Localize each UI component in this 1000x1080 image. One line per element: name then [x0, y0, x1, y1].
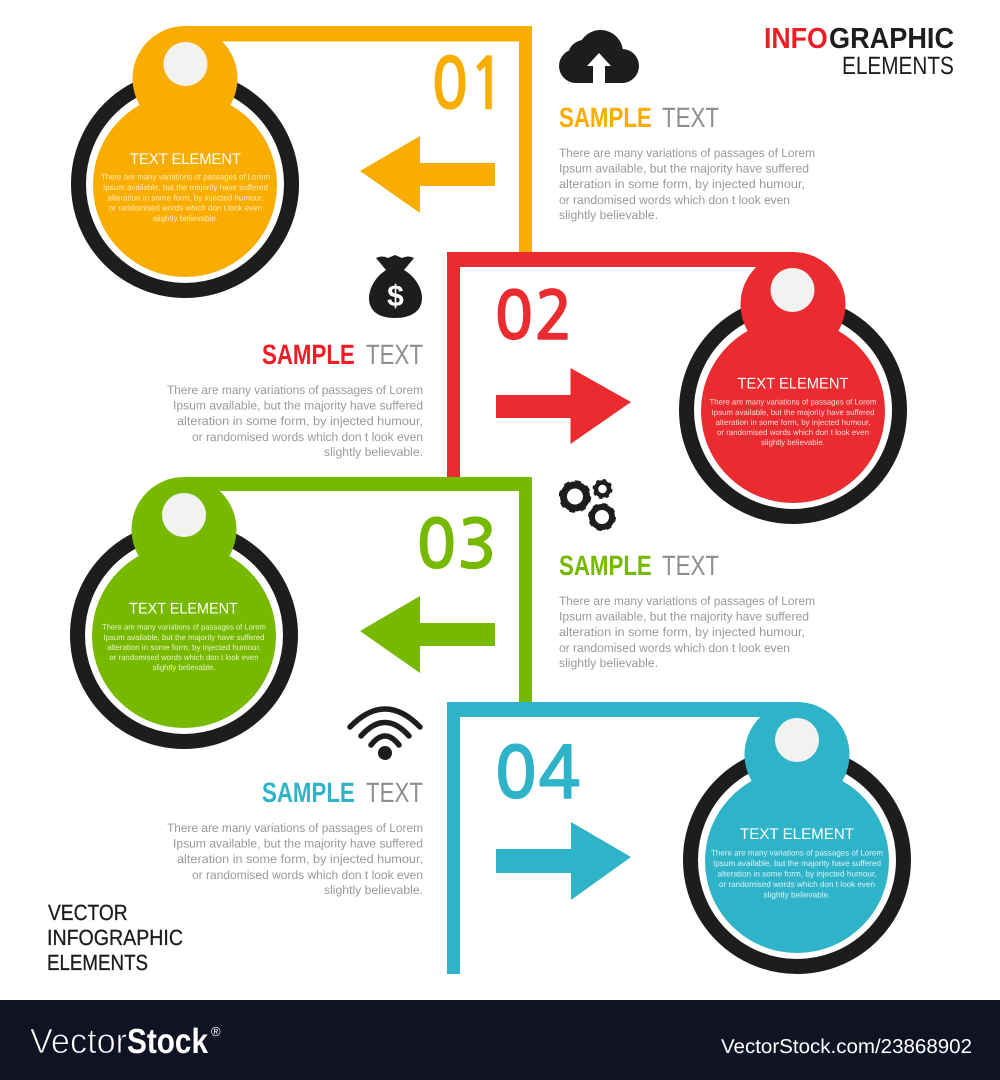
footer band [0, 1000, 1000, 1080]
footer logo [30, 1022, 221, 1061]
text block 1: alteration in some form, by injected humour, [559, 177, 805, 191]
number 02: 02 [494, 284, 574, 350]
medallion 1: or randomised words which don t look even [109, 204, 262, 212]
text block 4: SAMPLE [262, 777, 355, 808]
medallion 2: or randomised words which don t look even [717, 428, 869, 437]
medallion 2: slightly believable. [761, 438, 825, 447]
text block 3: alteration in some form, by injected humour, [559, 625, 805, 639]
number 04: 04 [494, 737, 581, 809]
text block 2: or randomised words which don t look even [192, 430, 423, 444]
medallion 4: or randomised words which don t look even [719, 880, 875, 889]
icon: cloud upload [559, 30, 639, 83]
text block 4: There are many variations of passages of Lorem [167, 821, 423, 835]
text block 4 [167, 777, 423, 897]
text block 2: SAMPLE [262, 339, 355, 370]
medallion 3: TEXT ELEMENT [129, 600, 238, 618]
footer url: VectorStock.com/23868902 [721, 1036, 972, 1058]
connector: red [447, 252, 793, 478]
icon: money bag [369, 255, 422, 318]
text block 2: TEXT [366, 339, 423, 370]
medallion 3: alteration in some form, by injected humour, [107, 643, 261, 652]
medallion 3 [78, 477, 290, 742]
medallion 2 [686, 252, 900, 516]
title: INFO [764, 23, 828, 55]
text block 4: slightly believable. [324, 883, 423, 897]
medallion 4: slightly believable. [764, 890, 830, 900]
medallion 2: TEXT ELEMENT [737, 376, 849, 392]
text block 3 [559, 550, 815, 670]
connector: blue [447, 702, 797, 974]
footer logo: ® [211, 1024, 221, 1039]
text block 1 [559, 102, 815, 222]
text block 2: Ipsum available, but the majority have suffered [173, 398, 423, 412]
caption: vector infographic elements: INFOGRAPHIC [47, 925, 183, 950]
medallion 2: alteration in some form, by injected humour, [716, 418, 870, 427]
footer logo: Stock [127, 1022, 208, 1061]
arrow 3 [360, 596, 495, 673]
text block 3: There are many variations of passages of Lorem [559, 594, 815, 608]
text block 2: slightly believable. [324, 445, 423, 459]
medallion 1 [78, 26, 292, 290]
text block 3: SAMPLE [559, 550, 652, 581]
text block 3: slightly believable. [559, 656, 658, 670]
text block 4: or randomised words which don t look even [192, 868, 423, 882]
medallion 1: TEXT ELEMENT [130, 151, 242, 168]
medallion 4: TEXT ELEMENT [740, 826, 854, 843]
medallion 3: or randomised words which don t look even [110, 653, 258, 662]
medallion 3: slightly believable. [152, 663, 216, 672]
medallion 1: There are many variations of passages of Lorem [101, 173, 270, 182]
medallion 3: Ipsum available, but the majority have suffered [104, 633, 264, 642]
medallion 4: alteration in some form, by injected humour, [718, 870, 876, 878]
medallion 2: There are many variations of passages of Lorem [710, 398, 877, 407]
connector: orange [185, 26, 532, 252]
medallion 4: There are many variations of passages of Lorem [711, 848, 883, 858]
text block 2 [167, 339, 423, 459]
number 01: 01 [431, 49, 506, 120]
text block 1: Ipsum available, but the majority have suffered [559, 162, 809, 176]
text block 1: There are many variations of passages of Lorem [559, 146, 815, 160]
text block 1: SAMPLE [559, 102, 652, 133]
text block 2: alteration in some form, by injected humour, [177, 414, 423, 428]
text block 4: alteration in some form, by injected humour, [177, 852, 423, 866]
text block 2: There are many variations of passages of Lorem [167, 383, 423, 397]
footer logo: Vector [30, 1022, 127, 1061]
caption: vector infographic elements: ELEMENTS [47, 950, 148, 975]
medallion 4 [690, 702, 904, 966]
icon: money bag: $ [387, 280, 404, 313]
text block 1: TEXT [662, 102, 719, 133]
title [764, 23, 954, 80]
medallion 1: slightly believable. [153, 214, 218, 223]
text block 3: TEXT [662, 550, 719, 581]
caption: vector infographic elements: VECTOR [48, 900, 128, 925]
text block 4: TEXT [366, 777, 423, 808]
caption: vector infographic elements [47, 900, 183, 975]
medallion 1: alteration in some form, by injected humour, [108, 193, 264, 202]
text block 1: slightly believable. [559, 208, 658, 222]
arrow 1 [360, 136, 495, 213]
medallion 3: There are many variations of passages of Lorem [102, 623, 266, 632]
text block 3: or randomised words which don t look even [559, 641, 790, 655]
title: GRAPHIC [829, 23, 954, 55]
text block 4: Ipsum available, but the majority have suffered [173, 836, 423, 850]
arrow 2 [496, 368, 631, 444]
title: ELEMENTS [842, 52, 954, 80]
medallion 1: Ipsum available, but the majority have suffered [103, 183, 268, 192]
connector: green [184, 477, 532, 702]
medallion 2: Ipsum available, but the majority have suffered [712, 408, 874, 417]
number 03: 03 [416, 512, 498, 579]
icon: gears [560, 480, 614, 530]
icon: wifi [350, 709, 420, 760]
text block 3: Ipsum available, but the majority have suffered [559, 610, 809, 624]
text block 1: or randomised words which don t look even [559, 193, 790, 207]
medallion 4: Ipsum available, but the majority have suffered [713, 859, 881, 868]
arrow 4 [496, 822, 631, 900]
